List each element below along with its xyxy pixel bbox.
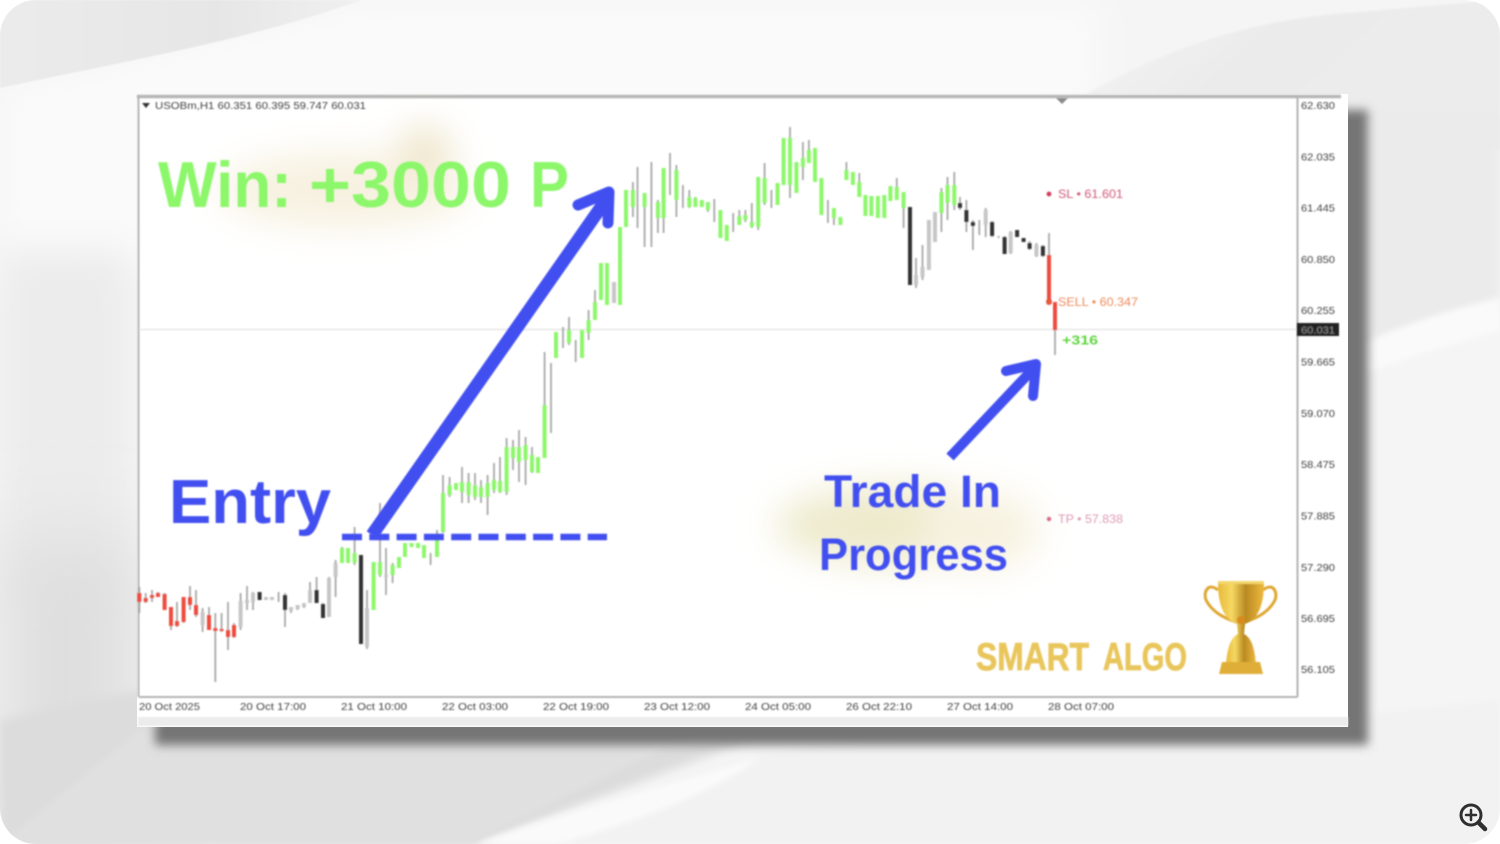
arrow: entry up to win (372, 192, 609, 535)
panel: chart screenshot (137, 94, 1348, 727)
time axis: 20 Oct 2025 (139, 701, 200, 713)
label: trade in progress: Trade In (824, 466, 1001, 517)
chart header symbol: USOBm,H1 60.351 60.395 59.747 60.031 (155, 101, 366, 112)
price axis: 57.885 (1301, 510, 1335, 522)
time axis: 22 Oct 03:00 (442, 701, 508, 713)
time axis: 23 Oct 12:00 (644, 701, 710, 713)
stop loss label: SL • 61.601 (1058, 189, 1123, 201)
chart drop shadow (155, 110, 1368, 745)
label: trade in progress: Progress (819, 529, 1008, 580)
beige smudge behind win text (220, 126, 470, 228)
brand: smart algo (976, 636, 1187, 679)
sell entry label: SELL • 60.347 (1058, 297, 1138, 309)
price axis: 62.630 (1301, 100, 1335, 112)
price axis: 59.070 (1301, 408, 1335, 420)
icon: zoom magnifier (1461, 805, 1485, 829)
price axis: 60.255 (1301, 305, 1335, 317)
red bodies (139, 255, 1055, 637)
dashed entry line (342, 534, 607, 540)
black bodies (260, 203, 1043, 644)
time axis: 22 Oct 19:00 (543, 701, 609, 713)
time axis: 28 Oct 07:00 (1048, 701, 1114, 713)
price axis: 61.445 (1301, 202, 1335, 214)
wicks (139, 127, 1055, 682)
price axis: 58.475 (1301, 459, 1335, 471)
icon: gold trophy (1205, 581, 1276, 674)
take profit label: TP • 57.838 (1058, 514, 1123, 526)
price axis (1297, 100, 1339, 676)
green bodies (342, 138, 954, 610)
label: entry: Entry (169, 468, 332, 537)
price axis: 62.035 (1301, 152, 1335, 164)
price axis: 60.850 (1301, 254, 1335, 266)
price axis: 60.031 (1301, 324, 1335, 336)
heading: win result: +3000 (309, 148, 511, 221)
price axis: 56.695 (1301, 613, 1335, 625)
label: trade in progress (819, 466, 1008, 580)
beige smudge behind trade text (775, 485, 1040, 570)
price axis: 56.105 (1301, 664, 1335, 676)
price axis: 59.665 (1301, 356, 1335, 368)
time axis: 21 Oct 10:00 (341, 701, 407, 713)
time axis: 24 Oct 05:00 (745, 701, 811, 713)
brand: smart algo: ALGO (1103, 636, 1187, 679)
current price line (140, 328, 1297, 330)
arrow: to current price (950, 364, 1036, 457)
heading: win result: P (530, 148, 569, 221)
heading: win result: Win: (158, 148, 292, 221)
heading: win result (158, 148, 569, 221)
live profit label: +316 (1062, 334, 1098, 348)
candlesticks (139, 127, 1055, 682)
time axis: 20 Oct 17:00 (240, 701, 306, 713)
time axis: 27 Oct 14:00 (947, 701, 1013, 713)
grey bodies (203, 210, 1036, 647)
time axis (139, 701, 1114, 713)
time axis: 26 Oct 22:10 (846, 701, 912, 713)
brand: smart algo: SMART (976, 636, 1089, 679)
price axis: 57.290 (1301, 562, 1335, 574)
